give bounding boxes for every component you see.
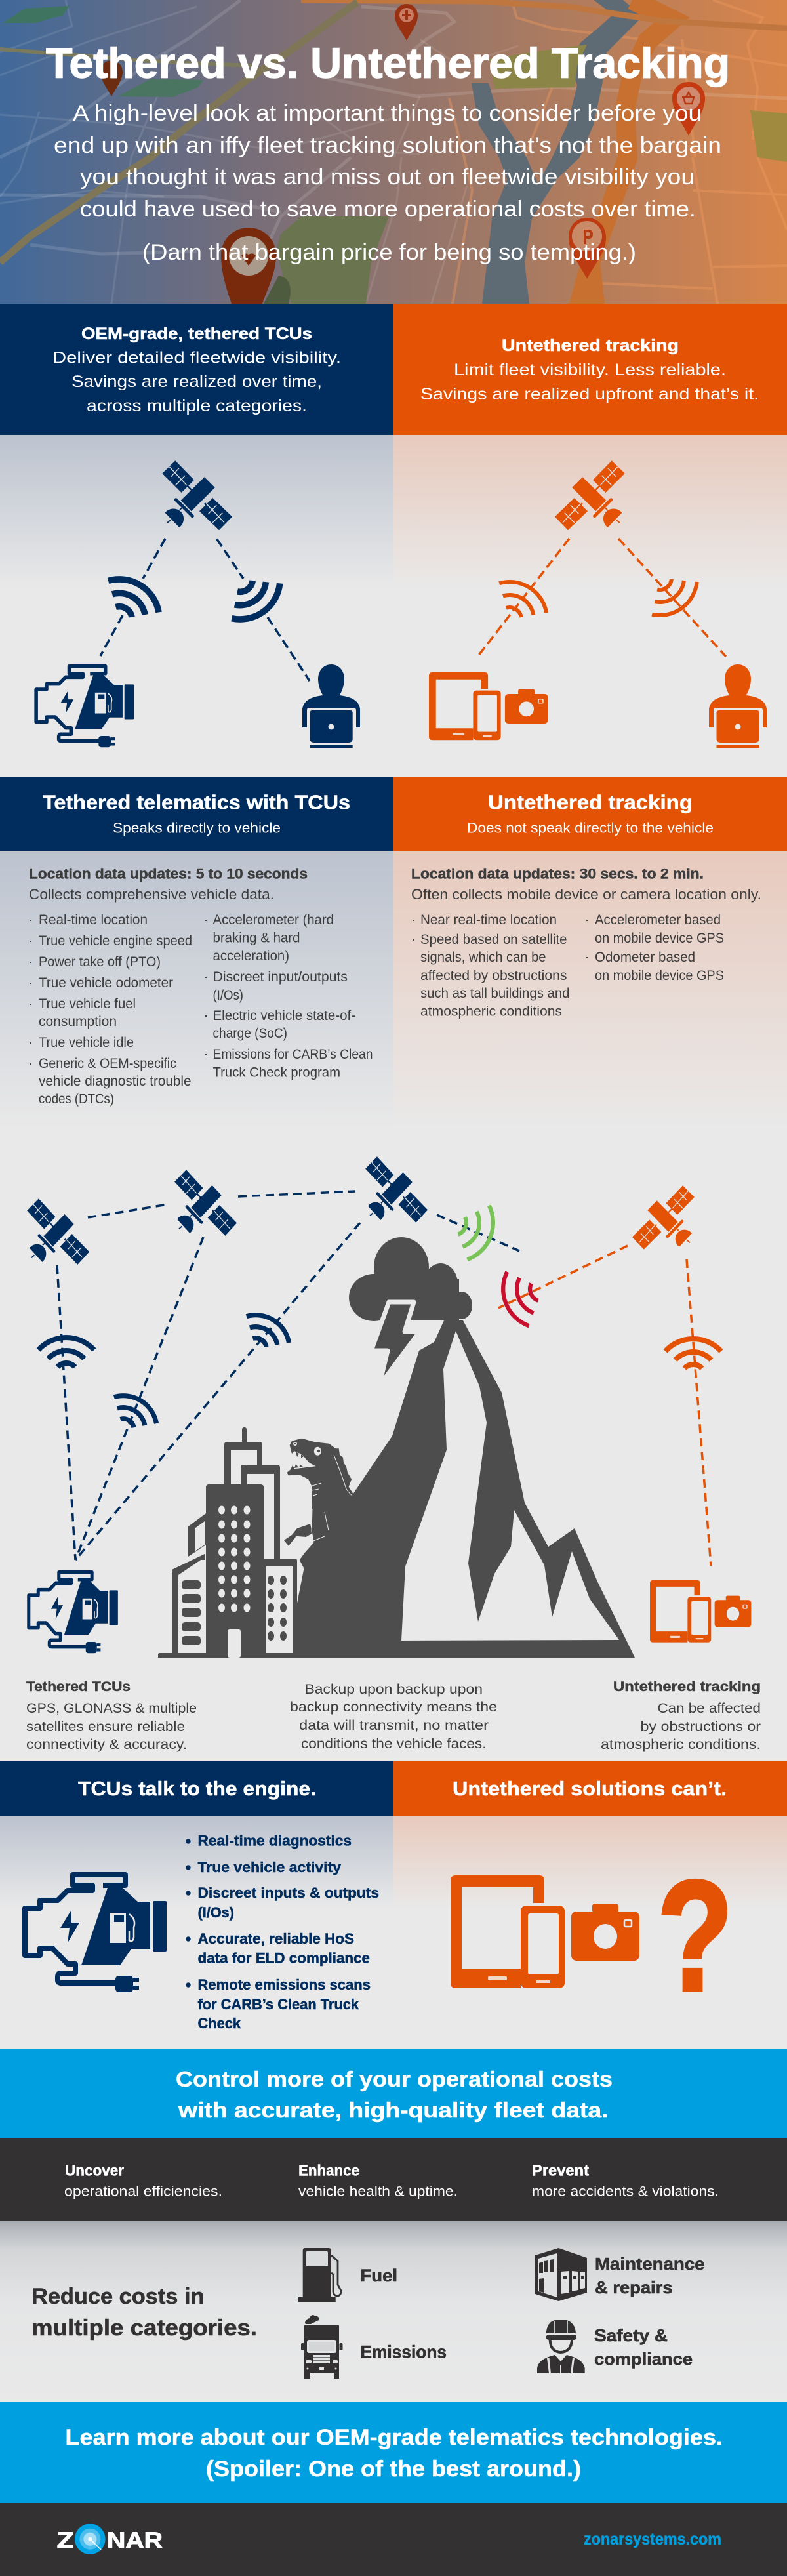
panel: tethered summary: OEM-grade, tethered TCUs bbox=[81, 325, 312, 343]
panel: tethered connection diagram bbox=[0, 435, 394, 748]
icon: maintenance building bbox=[535, 2248, 587, 2301]
panel: tethered summary: across multiple categories. bbox=[87, 397, 307, 415]
text block: backup connectivity caption: data will transmit, no matter bbox=[299, 1718, 489, 1733]
icon: satellite bbox=[555, 460, 625, 530]
icon: signal left bbox=[490, 573, 553, 627]
label: emissions: Emissions bbox=[361, 2342, 447, 2361]
icon: green signal bbox=[451, 1198, 501, 1265]
list column 1: such as tall buildings and bbox=[420, 986, 569, 1001]
icon: satellite 3 bbox=[365, 1156, 428, 1223]
footer bbox=[0, 2503, 787, 2576]
list column 2: charge (SoC) bbox=[212, 1026, 287, 1041]
list column 1 bbox=[413, 912, 569, 1019]
capability list: Real-time diagnostics bbox=[198, 1833, 352, 1849]
panel: tethered summary bbox=[0, 304, 394, 435]
label: safety and compliance: compliance bbox=[594, 2349, 693, 2369]
banner: learn more: Learn more about our OEM-grade telematics technologies. bbox=[66, 2425, 723, 2450]
panel: untethered summary bbox=[394, 304, 787, 435]
panel: TCUs talk to the engine bbox=[0, 1761, 394, 2032]
mountain bbox=[289, 1320, 635, 1658]
question mark: ? bbox=[657, 1848, 733, 2024]
parks bbox=[3, 0, 787, 304]
label: safety and compliance: Safety & bbox=[594, 2325, 668, 2345]
city buildings bbox=[158, 1427, 401, 1658]
list column 1: True vehicle engine speed bbox=[39, 933, 192, 949]
capability list: Discreet inputs & outputs bbox=[198, 1885, 379, 1901]
icon: worker bbox=[537, 2320, 585, 2373]
text block: tethered TCUs caption: satellites ensure reliable bbox=[26, 1719, 185, 1734]
list column 1: Real-time location bbox=[39, 912, 148, 928]
river bbox=[472, 0, 643, 304]
intro paragraph: (Darn that bargain price for being so tempting.) bbox=[142, 240, 636, 265]
list column 1 bbox=[30, 912, 192, 1107]
icon: signal 2 bbox=[106, 1387, 163, 1437]
icon: mobile devices and camera bbox=[451, 1875, 639, 1988]
list column 1: True vehicle odometer bbox=[39, 975, 173, 991]
heading: Untethered solutions can’t. bbox=[453, 1777, 727, 1800]
text block: tethered TCUs caption: Tethered TCUs bbox=[26, 1679, 131, 1694]
list column 2: on mobile device GPS bbox=[595, 968, 724, 983]
intro paragraph bbox=[54, 101, 721, 265]
capability list: Remote emissions scans bbox=[198, 1976, 371, 1993]
title: Tethered vs. Untethered Tracking bbox=[46, 39, 730, 87]
list column 1: True vehicle fuel bbox=[39, 996, 136, 1012]
chart: connectivity network illustration bbox=[27, 1156, 751, 1658]
text: enhance bbox=[298, 2162, 458, 2199]
list column 1: signals, which can be bbox=[420, 950, 546, 965]
text block: backup connectivity caption: Backup upon backup upon bbox=[304, 1682, 483, 1697]
capability list: (I/Os) bbox=[198, 1904, 234, 1921]
icon: large map pin bbox=[221, 228, 291, 304]
list column 1: atmospheric conditions bbox=[420, 1004, 562, 1019]
icon: orange satellite bbox=[632, 1185, 695, 1250]
label: fuel: Fuel bbox=[361, 2266, 397, 2285]
text block: untethered tracking caption: by obstructions or bbox=[640, 1719, 761, 1734]
banner: learn more bbox=[0, 2402, 787, 2503]
text: enhance: vehicle health & uptime. bbox=[298, 2184, 458, 2199]
capability list: for CARB’s Clean Truck bbox=[198, 1996, 359, 2013]
text block: tethered TCUs caption: GPS, GLONASS & multiple bbox=[26, 1701, 197, 1716]
connection lines: untethered bbox=[498, 1246, 711, 1566]
text block: backup connectivity caption: conditions the vehicle faces. bbox=[301, 1736, 487, 1751]
update rate: Location data updates: 5 to 10 seconds bbox=[29, 866, 308, 882]
panel: tethered summary: Savings are realized over time, bbox=[71, 373, 322, 391]
logo bbox=[57, 2524, 163, 2554]
icon: mobile devices and camera bbox=[429, 672, 548, 740]
list column 2: Electric vehicle state-of- bbox=[212, 1008, 355, 1023]
intro paragraph: you thought it was and miss out on fleetwide visibility you bbox=[80, 165, 695, 190]
icon: map pin parking bbox=[569, 218, 606, 279]
icon: storm cloud bbox=[349, 1237, 472, 1386]
icon: satellite 1 bbox=[27, 1198, 89, 1265]
panel: reduce costs bbox=[0, 2221, 787, 2402]
panel: untethered solutions can't bbox=[394, 1761, 787, 2024]
icon: person with laptop bbox=[709, 664, 767, 748]
text: prevent: Prevent bbox=[532, 2162, 589, 2179]
icon: engine bbox=[25, 1875, 167, 1992]
list column 2: Discreet input/outputs bbox=[212, 970, 348, 985]
text block: tethered TCUs caption bbox=[26, 1679, 197, 1752]
icon: orange signal bbox=[666, 1339, 721, 1368]
icon: map pin basket bbox=[672, 82, 705, 136]
text block: untethered tracking caption: atmospheric conditions. bbox=[601, 1737, 761, 1752]
text: uncover: Uncover bbox=[65, 2162, 124, 2179]
text: prevent bbox=[532, 2162, 719, 2199]
intro paragraph: could have used to save more operational costs over time. bbox=[80, 197, 696, 222]
panel: untethered tracking details bbox=[394, 777, 787, 1128]
capability list: True vehicle activity bbox=[198, 1859, 342, 1875]
connection lines bbox=[100, 539, 310, 681]
label: maintenance and repairs: Maintenance bbox=[595, 2254, 704, 2274]
text block: backup connectivity caption: backup connectivity means the bbox=[290, 1700, 497, 1715]
panel: uncover, enhance, prevent bbox=[0, 2138, 787, 2221]
icon: person with laptop bbox=[302, 664, 360, 748]
header map background bbox=[0, 0, 787, 304]
text block: untethered tracking caption: Can be affected bbox=[657, 1701, 761, 1716]
list column 1: Power take off (PTO) bbox=[39, 954, 161, 970]
panel: untethered summary: Untethered tracking bbox=[502, 337, 679, 355]
panel: untethered summary: Limit fleet visibility. Less reliable. bbox=[454, 361, 726, 379]
text block: tethered TCUs caption: connectivity & accuracy. bbox=[26, 1737, 187, 1752]
list column 1: True vehicle idle bbox=[39, 1035, 134, 1050]
icon: map pin left bbox=[100, 60, 123, 96]
icon: signal 1 bbox=[39, 1338, 94, 1367]
list column 1: vehicle diagnostic trouble bbox=[39, 1074, 192, 1089]
capability list: Accurate, reliable HoS bbox=[198, 1931, 354, 1947]
icon: red signal bbox=[495, 1265, 546, 1331]
list column 1: Generic & OEM-specific bbox=[39, 1056, 176, 1071]
list column 1: affected by obstructions bbox=[420, 968, 567, 983]
list column 1: consumption bbox=[39, 1014, 117, 1029]
text block: untethered tracking caption bbox=[601, 1679, 761, 1752]
list column 1: Speed based on satellite bbox=[420, 932, 567, 947]
list column 2: on mobile device GPS bbox=[595, 931, 724, 946]
heading: Untethered tracking bbox=[488, 790, 693, 813]
icon: engine bbox=[29, 1572, 118, 1653]
list column 2: acceleration) bbox=[212, 949, 289, 964]
icon: engine bbox=[36, 666, 134, 747]
list column 2: Truck Check program bbox=[212, 1065, 340, 1080]
label: maintenance and repairs bbox=[595, 2254, 704, 2297]
icon: map pin top bbox=[395, 4, 418, 41]
logo: Z bbox=[57, 2528, 74, 2553]
icon: satellite bbox=[162, 460, 232, 530]
list column 1: Near real-time location bbox=[420, 912, 557, 928]
panel: tethered telematics details bbox=[0, 777, 394, 1128]
banner: control more costs bbox=[0, 2049, 787, 2138]
update rate: Location data updates: 30 secs. to 2 min. bbox=[411, 866, 704, 882]
icon: signal right bbox=[221, 569, 288, 629]
label: safety and compliance bbox=[594, 2325, 693, 2369]
list column 2: Emissions for CARB’s Clean bbox=[212, 1047, 373, 1062]
heading: multiple categories. bbox=[31, 2316, 257, 2341]
icon: fuel pump bbox=[298, 2248, 341, 2302]
panel: untethered connection diagram bbox=[394, 435, 787, 748]
intro paragraph: A high-level look at important things to consider before you bbox=[73, 101, 702, 126]
banner: control more costs: with accurate, high-quality fleet data. bbox=[178, 2098, 608, 2122]
capability list: Check bbox=[198, 2015, 241, 2032]
list column 1: codes (DTCs) bbox=[39, 1092, 114, 1107]
panel: tethered summary: Deliver detailed fleetwide visibility. bbox=[52, 349, 341, 367]
text: enhance: Enhance bbox=[298, 2162, 359, 2179]
dinosaur bbox=[284, 1439, 367, 1574]
list column 2: (I/Os) bbox=[212, 988, 243, 1003]
subheading: Does not speak directly to the vehicle bbox=[467, 820, 714, 836]
capability list: data for ELD compliance bbox=[198, 1950, 370, 1967]
subheading: Speaks directly to vehicle bbox=[113, 820, 281, 836]
summary: Often collects mobile device or camera location only. bbox=[411, 886, 761, 903]
capability list bbox=[186, 1833, 379, 2032]
label: maintenance and repairs: & repairs bbox=[595, 2278, 673, 2297]
icon: signal right bbox=[642, 568, 704, 624]
website: zonarsystems.com bbox=[584, 2530, 721, 2548]
icon: signal 3 bbox=[238, 1307, 295, 1356]
text: prevent: more accidents & violations. bbox=[532, 2184, 719, 2199]
icon: satellite 2 bbox=[174, 1170, 237, 1236]
heading: Reduce costs in bbox=[31, 2284, 205, 2309]
text block: backup connectivity caption bbox=[290, 1682, 497, 1751]
heading: TCUs talk to the engine. bbox=[78, 1777, 316, 1800]
list column 2: Odometer based bbox=[595, 950, 695, 965]
icon: signal left bbox=[98, 569, 166, 628]
banner: learn more: (Spoiler: One of the best around.) bbox=[206, 2457, 581, 2482]
list column 2: Accelerometer (hard bbox=[212, 912, 334, 928]
list column 2 bbox=[586, 912, 724, 983]
logo: NAR bbox=[107, 2528, 163, 2553]
text block: untethered tracking caption: Untethered tracking bbox=[613, 1679, 761, 1694]
panel: untethered summary: Savings are realized upfront and that’s it. bbox=[420, 385, 759, 403]
heading: Tethered telematics with TCUs bbox=[43, 790, 350, 813]
intro paragraph: end up with an iffy fleet tracking solution that’s not the bargain bbox=[54, 133, 721, 158]
summary: Collects comprehensive vehicle data. bbox=[29, 886, 274, 903]
connection lines bbox=[478, 539, 726, 657]
list column 2: Accelerometer based bbox=[595, 912, 721, 928]
icon: mobile devices and camera bbox=[650, 1580, 751, 1643]
banner: control more costs: Control more of your operational costs bbox=[176, 2067, 613, 2091]
list column 2 bbox=[205, 912, 373, 1080]
connection lines: tethered bbox=[57, 1191, 519, 1560]
main roads bbox=[590, 0, 672, 262]
text: uncover: operational efficiencies. bbox=[64, 2184, 222, 2199]
icon: truck bbox=[301, 2315, 342, 2379]
text: uncover bbox=[64, 2162, 222, 2199]
heading bbox=[31, 2284, 257, 2341]
list column 2: braking & hard bbox=[212, 931, 300, 946]
